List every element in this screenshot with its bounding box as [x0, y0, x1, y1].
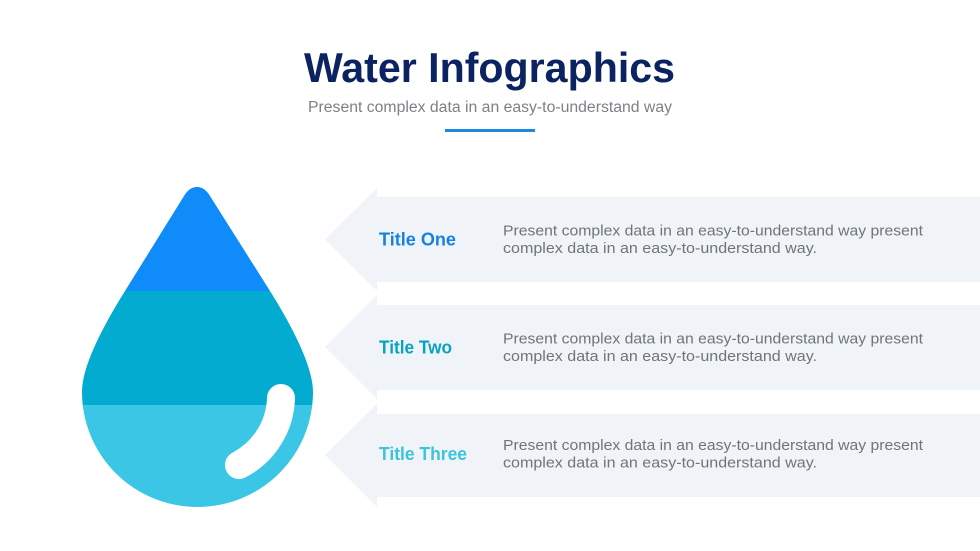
title underline — [445, 129, 535, 132]
arrow panel: title three — [325, 404, 980, 507]
drop bottom layer — [82, 405, 312, 507]
arrow shape — [325, 188, 980, 291]
text block — [503, 330, 924, 365]
text block — [503, 437, 924, 472]
text block: Present complex data in an easy-to-understand way present — [503, 222, 924, 240]
drop highlight — [239, 398, 281, 465]
icon: water drop — [82, 187, 313, 507]
heading: title one: Title One — [379, 228, 456, 250]
subtitle: Present complex data in an easy-to-understand way — [308, 99, 672, 116]
text block: complex data in an easy-to-understand way. — [503, 240, 817, 257]
text block: Present complex data in an easy-to-understand way present — [503, 437, 924, 454]
arrow panel: title one — [325, 188, 980, 291]
heading: title three: Title Three — [379, 443, 467, 464]
drop middle layer — [82, 291, 313, 405]
text block: complex data in an easy-to-understand way. — [503, 454, 817, 472]
text block: complex data in an easy-to-understand way. — [503, 348, 817, 365]
heading: title two: Title Two — [379, 336, 452, 358]
title: Water Infographics — [304, 44, 675, 91]
drop top layer — [125, 187, 270, 291]
text block: Present complex data in an easy-to-understand way present — [503, 330, 924, 348]
text block — [503, 222, 924, 257]
arrow shape — [325, 295, 980, 399]
arrow panel: title two — [325, 295, 980, 399]
arrow shape — [325, 404, 980, 507]
